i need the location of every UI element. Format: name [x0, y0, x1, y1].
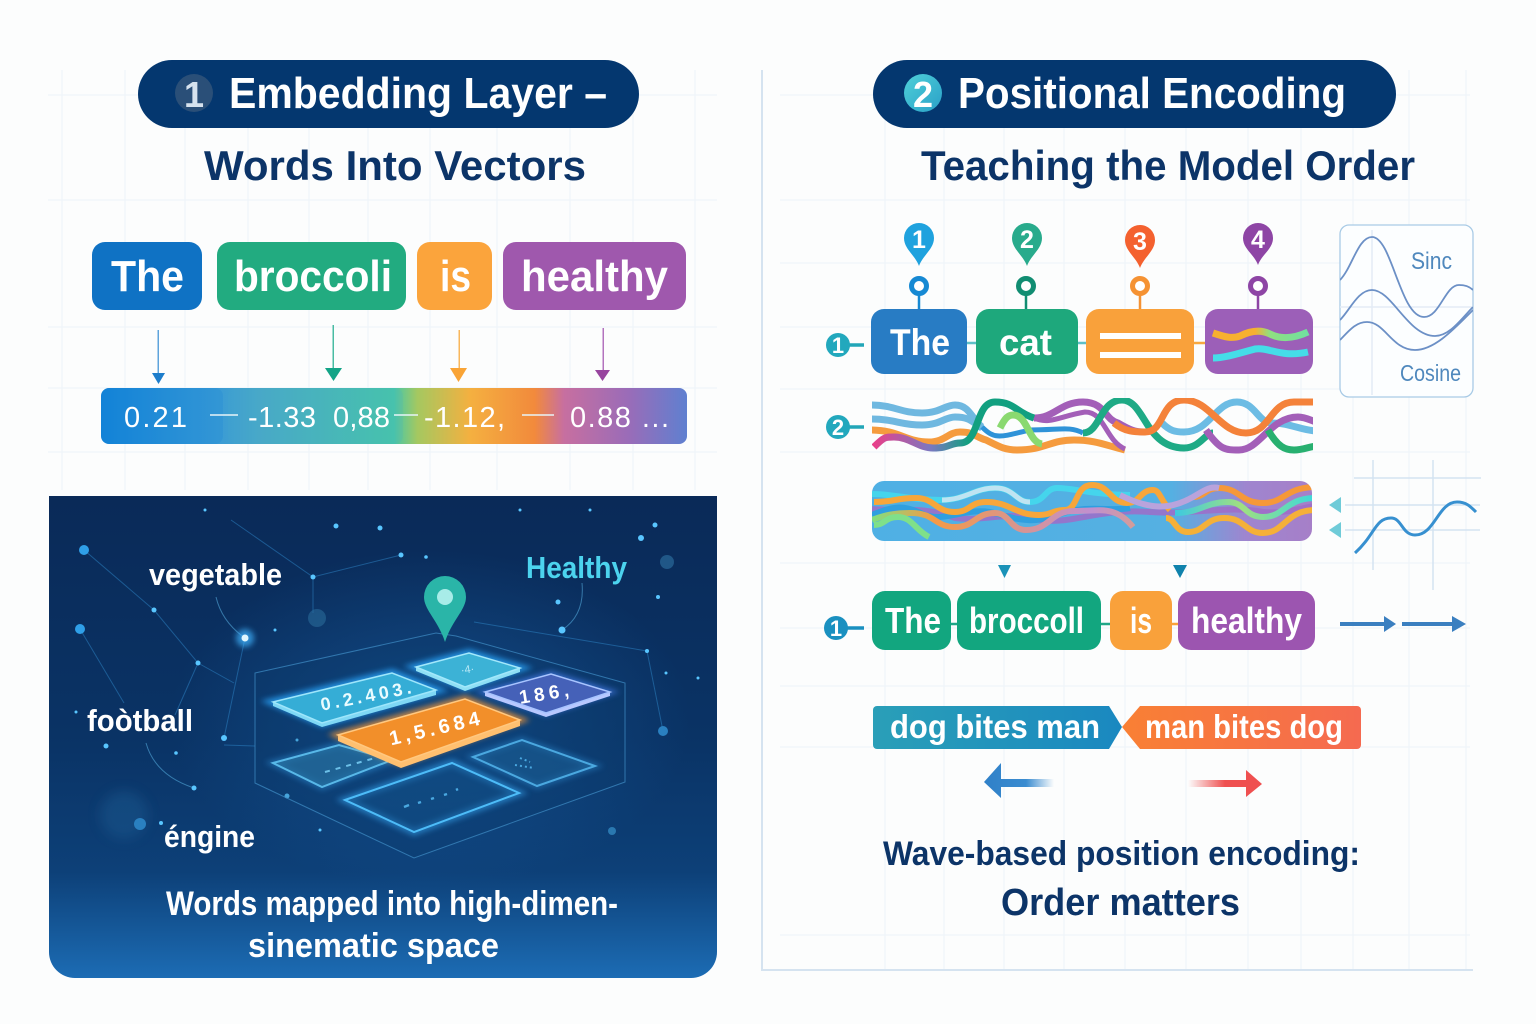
card: bottom outline — [345, 763, 519, 832]
token: The — [872, 591, 951, 650]
wave chart with input arrows — [1329, 460, 1481, 590]
heading: positional encoding — [873, 60, 1396, 128]
heading: embedding layer — [138, 60, 639, 128]
vector values: 0.21 — [124, 402, 187, 434]
caption line 1: Wave-based position encoding: — [883, 835, 1360, 873]
row badge 2 — [826, 415, 864, 440]
pin 1: 1 — [912, 226, 926, 254]
icon: map pin — [424, 576, 466, 642]
sinc and cosine chart — [1340, 225, 1473, 397]
flow arrows right — [1340, 616, 1466, 632]
card: orange value — [338, 699, 520, 768]
interwoven position waves — [870, 400, 1316, 450]
phrase: dog bites man: dog bites man — [890, 708, 1100, 745]
star field — [74, 508, 700, 839]
chip: is: is — [440, 252, 471, 301]
token: broccoll — [957, 591, 1101, 650]
vector cards — [273, 653, 610, 832]
title text: Embedding Layer – — [229, 69, 607, 118]
number badge 2: 2 — [913, 74, 933, 115]
row badge 1: 1 — [830, 616, 842, 641]
vector values: -1.12, — [424, 402, 505, 434]
vector values: -1.33 — [248, 402, 316, 434]
label: vegetable: vegetable — [149, 557, 282, 592]
input arrow top — [1329, 497, 1341, 513]
chip: healthy — [503, 242, 686, 310]
card: orange value: 1,5.684 — [387, 708, 483, 750]
combined embedding band — [872, 481, 1316, 541]
footer caption — [883, 835, 1360, 924]
constellation lines — [80, 520, 663, 788]
pin 2 — [1012, 223, 1042, 309]
chip: is — [417, 242, 492, 310]
chip: The — [92, 242, 202, 310]
vector values — [124, 402, 669, 434]
token: equals — [1086, 309, 1194, 374]
arrows: words to vectors — [152, 325, 610, 384]
card: small top — [416, 653, 520, 691]
subtitle: teaching the model order: Teaching the Model Order — [921, 142, 1415, 189]
phrase: man bites dog: man bites dog — [1145, 708, 1343, 745]
number badge 2 — [904, 74, 942, 115]
card: purple value: 186, — [518, 680, 570, 709]
subtitle: words into vectors: Words Into Vectors — [204, 142, 586, 189]
arrow: The — [152, 330, 165, 384]
order comparison — [873, 706, 1361, 798]
label: engine: éngine — [164, 819, 255, 854]
token: is: is — [1130, 600, 1152, 641]
down markers — [998, 565, 1187, 578]
card: purple value — [485, 674, 610, 717]
panel: embedding space — [49, 496, 717, 978]
arrow 1 — [1340, 616, 1396, 632]
pin 4 — [1243, 223, 1273, 309]
pin 4: 4 — [1251, 226, 1265, 254]
token: The: The — [890, 322, 950, 363]
token: wave — [1205, 309, 1313, 374]
row badge 2: 2 — [832, 415, 844, 440]
token: healthy — [1178, 591, 1315, 650]
card: small top: ·4· — [460, 663, 475, 677]
row badge 1 — [824, 616, 864, 641]
card: cyan value: 0.2.403. — [319, 678, 413, 715]
chip: broccoli: broccoli — [234, 252, 392, 301]
number badge 1: 1 — [184, 74, 204, 115]
label: healthy: Healthy — [526, 550, 628, 585]
card: low left — [273, 745, 392, 787]
arrow: is — [450, 330, 467, 382]
token: The: The — [885, 600, 941, 641]
pin 3 — [1125, 225, 1155, 309]
arrow: broccoli — [325, 325, 342, 381]
vector values: 0.88 ... — [570, 402, 669, 434]
pin 1 — [904, 223, 934, 309]
word chips — [92, 242, 686, 310]
title pill — [138, 60, 639, 128]
panel caption — [166, 885, 618, 965]
number badge 1 — [175, 74, 213, 115]
token row — [826, 309, 1313, 374]
chart label: Sinc: Sinc — [1411, 248, 1452, 275]
wave line — [1355, 502, 1476, 553]
vector values: 0,88 — [333, 402, 390, 434]
token: broccoll: broccoll — [969, 600, 1084, 641]
chip: broccoli — [217, 242, 406, 310]
arrow right — [1188, 770, 1262, 797]
panel caption: sinematic space — [248, 927, 499, 965]
row badge 1 — [826, 333, 864, 358]
position pins — [904, 223, 1273, 309]
chip: healthy: healthy — [521, 252, 669, 301]
input arrow bottom — [1329, 522, 1341, 538]
label: football: foòtball — [87, 703, 193, 738]
sentence token row — [824, 591, 1315, 650]
title pill — [873, 60, 1396, 128]
isometric box outline — [255, 633, 625, 858]
token: cat — [976, 309, 1078, 374]
token: healthy: healthy — [1191, 600, 1302, 641]
pin 3: 3 — [1133, 228, 1147, 256]
arrow: healthy — [595, 328, 610, 381]
chart label: Cosine: Cosine — [1400, 360, 1461, 386]
title text: Positional Encoding — [958, 69, 1346, 118]
token: is — [1110, 591, 1172, 650]
word labels — [87, 550, 628, 854]
token: cat: cat — [999, 322, 1052, 363]
arrow left — [984, 763, 1054, 798]
token: The — [871, 309, 967, 374]
panel caption: Words mapped into high-dimen- — [166, 885, 618, 923]
bright star — [236, 629, 254, 647]
row badge 1: 1 — [832, 333, 844, 358]
chip: The: The — [111, 252, 184, 301]
arrow 2 — [1402, 616, 1466, 632]
card: cyan value — [273, 673, 436, 727]
card: low right — [473, 740, 595, 786]
caption line 2: Order matters — [1001, 882, 1240, 924]
vector number bar — [101, 388, 687, 444]
pin 2: 2 — [1020, 226, 1034, 254]
